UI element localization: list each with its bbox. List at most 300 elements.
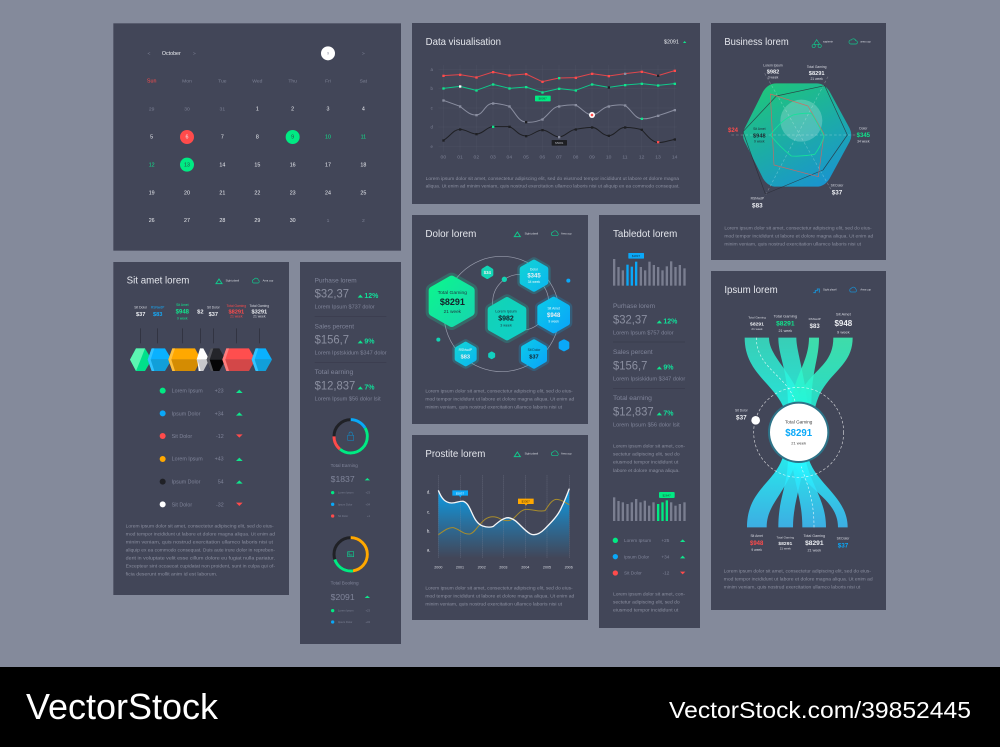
line chart: b — [430, 86, 433, 91]
day grid: 11 — [361, 135, 366, 141]
hexagon bubble chart — [433, 256, 570, 372]
day grid: 21 — [219, 190, 225, 196]
value labels: Total Gaming — [250, 304, 269, 308]
hexagon bubble chart: 34 week — [528, 280, 541, 284]
description text: minim veniam, quis nostrud exercitation ullamco laboris nisi ut — [425, 404, 563, 409]
legend list — [160, 388, 243, 508]
description text: aliqua. Ut enim ad minim veniam, quis nostrud exercitation ullamco laboris nisi ut aliquip ex ea commodo consequat. — [426, 184, 680, 189]
panel: dolor lorem — [412, 215, 588, 424]
day grid: 17 — [325, 162, 331, 168]
panel: data visualisation — [412, 23, 700, 204]
stat: total earning: Lorem Ipsum $56 dolor lsit — [613, 423, 680, 429]
hexagon bubble chart: Total Gaming — [438, 290, 467, 296]
panel: stats and donuts — [300, 262, 401, 644]
day grid: 28 — [219, 218, 225, 224]
top value labels: RSNwdP — [809, 317, 821, 321]
donut: total booking — [331, 538, 371, 624]
calendar header: > — [362, 51, 365, 57]
day grid: 8 — [256, 135, 259, 141]
line chart: 00 — [441, 155, 446, 161]
bottom value labels — [750, 534, 850, 552]
radar chart — [728, 64, 871, 210]
bottom value labels: $8291 — [805, 540, 824, 547]
heading: Dolor lorem — [425, 229, 476, 240]
day grid: 31 — [220, 107, 225, 113]
hexagon bubble chart: Dolor — [530, 267, 539, 271]
stat: purchase: Purhase lorem — [613, 304, 655, 310]
stat: sales: 9% — [663, 364, 674, 371]
day grid: 14 — [219, 162, 225, 168]
description text — [724, 226, 874, 247]
footer url: VectorStock.com/39852445 — [669, 697, 971, 723]
line chart: 03 — [490, 155, 496, 161]
line chart: d — [430, 125, 433, 130]
legend list: +34 — [215, 411, 224, 417]
donut: total earning: +1 — [367, 514, 371, 518]
day grid: 25 — [360, 190, 366, 196]
sankey diagram — [745, 338, 853, 527]
panel: business lorem — [711, 23, 886, 260]
value labels: $2 — [197, 309, 203, 315]
legend icons: Sight plawil — [525, 452, 539, 456]
radar chart: Sit Amet — [753, 127, 766, 131]
total value — [664, 40, 686, 46]
day grid: 30 — [184, 107, 190, 113]
line chart: 10 — [606, 155, 612, 161]
bottom value labels: 21 week — [780, 547, 791, 551]
bottom value labels: Total Gaming — [777, 535, 794, 539]
day grid: 10 — [325, 135, 331, 141]
radar chart: $24 — [728, 128, 739, 134]
description text lower: sectetur adipiscing elit, sed do — [613, 600, 680, 605]
value labels: RSNwdP — [151, 305, 165, 309]
description text: sectetur adipiscing elit, sed do — [613, 452, 680, 457]
radar chart: 34 week — [857, 140, 870, 144]
heading: Sit amet lorem — [127, 276, 189, 287]
footer logo: VectorStock — [26, 686, 219, 727]
description text: Lorem ipsum dolor sit amet, consectetur adipiscing elit, sed do eius- — [425, 388, 573, 393]
line chart: 06 — [540, 155, 545, 161]
legend list: Lorem Ipsum — [172, 457, 203, 463]
line chart: 14 — [672, 155, 678, 161]
legend list: Lorem Ipsum — [172, 389, 203, 395]
hexagon bubble chart: $8291 — [440, 297, 465, 307]
description text — [425, 388, 575, 409]
description text: mod tempor incididunt ut labore et dolore magna aliqua. Ut enim ad — [724, 234, 874, 239]
heading: Business lorem — [724, 37, 789, 48]
legend icons: Area cup — [561, 232, 572, 236]
donut: total earning: Lorem Ipsum — [338, 491, 354, 495]
description text: Lorem ipsum dolor sit amet, consectetur adipiscing elit, sed do eiusmod tempor incididunt ut labore et dolore magna — [426, 176, 679, 181]
line chart: c — [431, 106, 434, 111]
description text: Lorem ipsum dolor sit amet, con- — [613, 444, 685, 449]
legend list: Ipsum Dolor — [624, 554, 650, 559]
description text: labore et dolore magna aliqua. — [613, 468, 680, 473]
top value labels: $8291 — [776, 321, 795, 328]
bottom value labels: $37 — [838, 543, 849, 550]
heading: Ipsum lorem — [724, 285, 778, 296]
donut: total booking: Ipsum Dolor — [338, 620, 352, 624]
legend list: Ipsum Dolor — [172, 411, 201, 417]
legend icons: Sight plawil — [226, 279, 240, 283]
stat: purchase: 12% — [663, 318, 678, 325]
stat: purchase: Lorem Ipsum $757 dolor — [613, 330, 674, 336]
calendar header — [148, 46, 365, 60]
stat: sales: Lorem Ipstskidum $347 dolor — [315, 350, 387, 356]
stat: total earning — [613, 396, 680, 429]
hexagon bubble chart: $83 — [461, 354, 470, 360]
value labels: 21 week — [253, 315, 266, 319]
weekday row: Fri — [325, 79, 331, 85]
day grid: 4 — [362, 107, 365, 113]
day grid: 12 — [149, 162, 155, 168]
radar chart: $982 — [767, 70, 779, 76]
day grid: 30 — [290, 218, 296, 224]
sankey diagram: Total Gaming — [785, 420, 813, 425]
area chart: 2002 — [478, 565, 486, 569]
description text: Lorem ipsum dolor sit amet, consectetur adipiscing elit, sed do eius- — [724, 568, 871, 573]
top value labels: $8291 — [750, 321, 764, 327]
stat: sales: $156,7 — [613, 359, 647, 372]
donut: total earning: Total Earning — [331, 463, 358, 468]
description text: minim veniam, quis nostrud exercitation ullamco laboris nisi ut — [425, 601, 563, 606]
description text — [613, 444, 685, 473]
legend list: -32 — [216, 502, 224, 508]
legend icons — [216, 278, 274, 284]
weekday row: Sat — [360, 79, 368, 85]
line chart: $5081 — [555, 141, 564, 145]
hexagon bubble chart: Sit Dolor — [528, 348, 541, 352]
line chart: 12 — [639, 155, 645, 161]
radar chart: $8291 — [809, 71, 825, 77]
bottom value labels: 21 week — [808, 548, 821, 552]
description text — [724, 568, 873, 589]
donut: total booking: +23 — [365, 609, 371, 613]
legend icons: Sight plawil — [823, 288, 837, 292]
legend list: +23 — [215, 389, 224, 395]
top value labels: $83 — [810, 324, 820, 330]
hexagon bubble chart: RSNwdP — [459, 348, 473, 352]
hexagon bubble chart: $37 — [529, 354, 539, 360]
donut: total earning: Ipsum Dolor — [338, 502, 352, 506]
hexagon bubble chart: $982 — [498, 316, 514, 323]
calendar header: > — [193, 51, 196, 57]
sankey diagram: 21 week — [791, 441, 806, 446]
legend list: Sit Dolor — [172, 502, 192, 508]
stat: total earning: 7% — [364, 384, 375, 391]
bar chart top: $1837 — [632, 254, 640, 258]
legend list: +43 — [215, 457, 224, 463]
side label: $37 — [736, 415, 747, 422]
description text lower — [613, 592, 685, 613]
radar chart: Total Gaming — [807, 65, 827, 69]
radar chart: $37 — [832, 190, 843, 197]
line chart: 04 — [507, 155, 512, 161]
legend icons — [812, 39, 871, 48]
heading: Prostite lorem — [425, 449, 485, 460]
hexagon bubble chart: Lorem Ipsum — [495, 309, 517, 313]
area chart: d. — [427, 490, 430, 495]
area chart: 2001 — [456, 565, 464, 569]
value labels: 9 week — [177, 316, 188, 320]
day grid: 29 — [254, 218, 260, 224]
line chart: 02 — [474, 155, 479, 161]
panel: ipsum lorem — [711, 271, 886, 610]
line chart: 08 — [573, 155, 579, 161]
weekday row: Mon — [182, 79, 192, 85]
donut: total earning: +23 — [365, 491, 371, 495]
radar chart: 9 week — [754, 139, 765, 143]
day grid: 9 — [291, 135, 294, 141]
legend list: -12 — [663, 571, 670, 576]
day grid: 18 — [360, 162, 366, 168]
calendar header: 9 — [327, 52, 329, 56]
stat: sales: Sales percent — [613, 350, 653, 356]
value labels: Sit Dolor — [134, 306, 148, 310]
donut: total booking: Total Booking — [331, 581, 359, 586]
description text: aliquip ex ea commodo consequat. Duis aute irure dolor in repreben- — [126, 548, 275, 553]
day grid: 29 — [149, 107, 155, 113]
description text: Lorem ipsum dolor sit amet, consectetur adipiscing elit, sed do eius- — [126, 524, 274, 529]
legend icons: Area cup — [263, 279, 274, 283]
side label: Sit Dolor — [735, 408, 749, 412]
value labels: $37 — [136, 312, 145, 318]
legend icons — [514, 451, 572, 457]
day grid: 19 — [149, 190, 155, 196]
bottom value labels: Total Gaming — [804, 534, 825, 538]
line chart: a — [430, 67, 433, 72]
area chart: 2005 — [543, 565, 551, 569]
stat: sales: 9% — [364, 339, 375, 346]
donut: total earning: Sit Dolor — [338, 514, 348, 518]
value labels: Total Gaming — [227, 304, 246, 308]
donut: total booking: +34 — [365, 620, 371, 624]
day grid: 2 — [291, 107, 294, 113]
weekday row — [147, 79, 368, 85]
description text: mod tempor incididunt ut labore et dolore magna aliqua. Ut enim ad — [425, 396, 575, 401]
value labels: Sit Dolor — [207, 306, 221, 310]
stat: sales — [613, 350, 686, 382]
description text: mod tempor incididunt ut labore et dolore magna aliqua. Ut enim ad — [126, 532, 275, 537]
legend list: -12 — [216, 434, 224, 440]
line chart: e — [430, 144, 433, 149]
area chart: 2004 — [521, 565, 529, 569]
legend list: +34 — [661, 554, 670, 559]
line chart: $8097 — [539, 97, 547, 101]
legend icons — [813, 287, 871, 293]
day grid: 20 — [184, 190, 190, 196]
stat: purchase: Purhase lorem — [315, 278, 357, 284]
legend icons — [514, 231, 572, 237]
hexagon bubble chart: 9 week — [548, 319, 559, 323]
hexagon bubble chart: $345 — [527, 274, 541, 280]
stat: purchase: $32,37 — [315, 288, 349, 301]
calendar header: October — [162, 51, 181, 57]
hexagon bubble chart: $948 — [547, 313, 561, 319]
day grid: 7 — [221, 135, 224, 141]
top value labels: Sit Amet — [836, 312, 852, 317]
legend list: Sit Dolor — [172, 434, 192, 440]
weekday row: Thu — [288, 79, 297, 85]
panel: sit amet lorem — [113, 262, 289, 595]
area chart: 2003 — [499, 565, 507, 569]
panel: calendar — [113, 23, 401, 251]
legend icons: Sight plawil — [525, 232, 539, 236]
weekday row: Tue — [218, 79, 227, 85]
description text: Excepteur sint occaecat cupidatat non proident, sunt in culpa qui of- — [126, 564, 275, 569]
hexagon bubble chart: 21 week — [444, 309, 462, 314]
bottom value labels: Sit Dolor — [837, 536, 850, 540]
day grid: 13 — [184, 162, 190, 168]
donut: total booking: $2091 — [331, 592, 355, 602]
bar chart top — [613, 253, 686, 286]
hexagon bubble chart: 3 week — [500, 324, 512, 328]
hexagon chain — [130, 348, 272, 371]
stat: total earning: Lorem Ipsum $56 dolor lsit — [315, 396, 381, 402]
legend list: Lorem Ipsum — [624, 538, 651, 543]
area chart: 2006 — [565, 565, 573, 569]
line chart: 13 — [655, 155, 661, 161]
value labels: 21 week — [230, 315, 243, 319]
radar chart: 3 week — [768, 76, 779, 80]
description text lower: eiusmod tempor incididunt ut — [613, 608, 679, 613]
description text: Lorem ipsum dolor sit amet, consectetur adipiscing elit, sed do eius- — [724, 226, 872, 231]
legend icons: Area cup — [561, 452, 572, 456]
line chart: 01 — [457, 155, 463, 161]
day grid: 15 — [254, 162, 260, 168]
value labels: $83 — [153, 312, 162, 318]
stat: purchase — [613, 304, 678, 336]
day grid — [149, 107, 366, 224]
stat: sales: Sales percent — [315, 324, 354, 330]
stat: total earning: Total earning — [613, 396, 652, 402]
description text: mod tempor incididunt ut labore et dolore magna aliqua. Ut enim ad — [724, 576, 873, 581]
radar chart: Sit Dolor — [831, 184, 844, 188]
top value labels: Total Gaming — [774, 313, 797, 318]
day grid: 1 — [327, 218, 330, 224]
day grid: 5 — [150, 135, 153, 141]
stat: sales — [315, 324, 387, 356]
bottom value labels: Sit Amet — [750, 534, 763, 538]
area chart: 2000 — [434, 565, 442, 569]
bar chart bottom: $2647 — [663, 493, 671, 497]
heading: Data visualisation — [426, 37, 501, 48]
radar chart: $83 — [752, 203, 763, 210]
panel: prostite lorem — [412, 435, 588, 620]
legend list: 54 — [218, 480, 224, 486]
area chart: a. — [427, 548, 430, 553]
description text: minim veniam, quis nostrud exercitation ullamco laboris nisi ut — [724, 584, 861, 589]
stat: total earning: $12,837 — [613, 405, 654, 418]
legend icons: sapiente — [823, 40, 834, 44]
legend list: Ipsum Dolor — [172, 480, 201, 486]
radar chart: 21 week — [810, 77, 823, 81]
heading: Tabledot lorem — [613, 229, 677, 240]
stat: purchase: $32,37 — [613, 313, 647, 326]
description text: eiusmod tempor incididunt ut — [613, 460, 679, 465]
top value labels: 21 week — [779, 329, 792, 333]
stat: purchase: 12% — [364, 293, 379, 300]
stat: sales: $156,7 — [315, 334, 349, 347]
weekday row: Sun — [147, 79, 156, 85]
legend icons: Area cup — [860, 288, 871, 292]
stat: purchase: Lorem Ipsum $737 dolor — [315, 305, 375, 311]
description text: Lorem ipsum dolor sit amet, consectetur adipiscing elit, sed do eius- — [425, 585, 573, 590]
description text — [426, 176, 680, 189]
radar chart: $345 — [857, 133, 871, 139]
line chart: 07 — [556, 155, 562, 161]
value labels: $3291 — [251, 309, 267, 315]
bar chart bottom — [613, 492, 686, 521]
line chart: 11 — [622, 155, 628, 161]
bottom value labels: 9 week — [751, 548, 762, 552]
description text: derit in voluptate velit esse cillum dolore eu fugiat nulla pariatur. — [126, 556, 275, 561]
hexagon bubble chart: $34 — [484, 270, 492, 275]
top value labels: 21 week — [751, 327, 763, 331]
stat: total earning — [315, 370, 381, 402]
day grid: 1 — [256, 107, 259, 113]
donut: total earning: +34 — [365, 502, 371, 506]
value labels — [134, 303, 269, 320]
side label — [735, 408, 749, 422]
bottom value labels: $8291 — [778, 541, 792, 547]
day grid: 22 — [254, 190, 260, 196]
sankey diagram: $8291 — [785, 428, 813, 439]
area chart: $3307 — [522, 500, 530, 504]
legend list: Sit Dolor — [624, 571, 642, 576]
radar chart: $948 — [753, 133, 766, 139]
weekday row: Wed — [252, 79, 263, 85]
hexagon bubble chart: Sit Amet — [547, 307, 560, 311]
line chart — [430, 65, 678, 161]
radar chart: Dolor — [859, 127, 868, 131]
calendar header: < — [148, 51, 151, 57]
radar chart: Lorem Ipsum — [763, 64, 783, 68]
top value labels: $948 — [834, 319, 853, 328]
radar chart: RSNwdP — [751, 196, 765, 200]
description text: minim veniam, quis nostrud exercitation ullamco laboris nisi ut — [724, 242, 862, 247]
stat: total earning: $12,837 — [315, 379, 355, 392]
legend icons: area cup — [860, 40, 871, 44]
stat: total earning: Total earning — [315, 370, 353, 376]
description text: ficia deserunt mollit anim id est laborum. — [126, 572, 217, 577]
day grid: 24 — [325, 190, 331, 196]
day grid: 16 — [290, 162, 296, 168]
value labels: $8291 — [228, 309, 244, 315]
day grid: 2 — [362, 218, 365, 224]
area chart: $5837 — [456, 491, 464, 495]
value labels: $948 — [176, 310, 190, 316]
description text: minim veniam, quis nostrud exercitation ullamco laboris nisi ut — [126, 540, 274, 545]
line chart: 09 — [589, 155, 595, 161]
donut: total booking: Lorem Ipsum — [338, 609, 354, 613]
day grid: 23 — [290, 190, 296, 196]
bottom value labels: $948 — [750, 541, 764, 547]
donut: total earning — [331, 420, 371, 518]
line chart: 05 — [523, 155, 529, 161]
legend list — [613, 538, 685, 576]
stat: total earning: 7% — [663, 410, 674, 417]
value labels: $37 — [209, 312, 218, 318]
total value: $2091 — [664, 40, 679, 46]
area chart: b. — [427, 529, 430, 534]
legend list: +25 — [661, 538, 670, 543]
stat: purchase — [315, 278, 379, 311]
panel: tabledot lorem — [599, 215, 700, 628]
donut: total earning: $1837 — [331, 474, 355, 484]
description text — [126, 524, 275, 577]
top value labels — [748, 312, 853, 335]
